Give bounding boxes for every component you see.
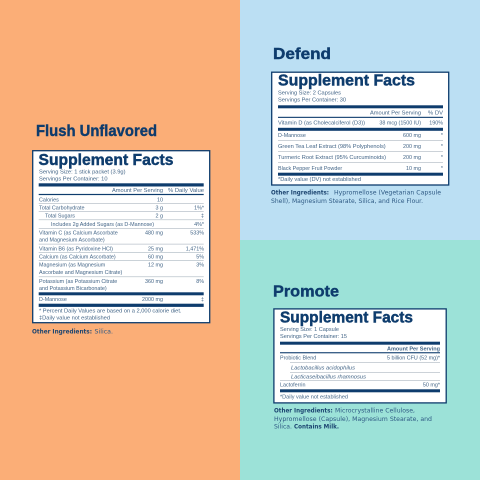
nutrient rows: 1,471% [186,246,204,252]
other ingredients: Defend: Other Ingredients: [271,190,329,197]
serving information: Serving Size: 1 stick packet (3.9g) [39,169,126,175]
nutrient rows: 3 g [156,205,163,211]
other ingredients: Defend [271,190,441,205]
other ingredients: Promote: Contains Milk. [294,423,339,430]
D-Mannose row: 2000 mg [142,297,163,303]
D-Mannose row: ‡ [201,297,204,303]
nutrient rows: 1%* [194,205,205,211]
label title: Supplement Facts [278,73,415,90]
ingredient rows: D-Mannose [278,133,306,139]
serving information: Serving Size: 1 Capsule [280,327,339,333]
ingredient rows [278,133,444,172]
serving information: Servings Per Container: 30 [278,98,346,104]
nutrient rows: Vitamin C (as Calcium Ascorbate [39,231,118,237]
serving information [280,327,347,340]
nutrient rows: Potassium (as Potassium Citrate [39,279,117,285]
probiotic blend rows: Lactobacillus acidophilus [291,365,355,371]
column headers [112,188,204,194]
label title: Supplement Facts [38,152,174,169]
nutrient rows: Total Sugars [45,214,75,220]
nutrient rows: 2 g [156,214,163,220]
ingredient rows: * [441,166,444,172]
ingredient rows: Turmeric Root Extract (95% Curcuminoids) [278,155,386,161]
nutrient rows: 533% [190,231,204,237]
other ingredients: Promote [274,408,432,430]
nutrient rows: ‡ [201,214,204,220]
nutrient rows: 10 [157,197,163,203]
column headers [370,110,443,116]
footnotes: ‡Daily value not established [39,315,110,321]
ingredient rows: Black Pepper Fruit Powder [278,166,342,172]
nutrient rows: 8% [196,279,204,285]
other ingredients: Defend: Hypromellose (Vegetarian Capsule [334,190,441,197]
probiotic blend rows: 50 mg* [423,382,441,388]
D-Mannose row [39,297,204,303]
nutrient rows [39,197,205,292]
footnotes: * Percent Daily Values are based on a 2,000 calorie diet. [39,308,182,314]
column header: Amount Per Serving [387,346,440,352]
serving information [278,91,346,104]
ingredient rows: * [441,155,444,161]
nutrient rows: and Magnesium Ascorbate) [39,238,105,244]
nutrient rows: 4%* [194,222,205,228]
ingredient rows: 600 mg [403,133,421,139]
column headers: % DV [428,110,443,116]
footnote: *Daily value not established [280,395,348,401]
footnote: *Daily value (DV) not established [278,177,361,183]
probiotic blend rows [280,356,441,388]
D-Mannose row: D-Mannose [39,297,67,303]
Vitamin D row: 38 mcg (1500 IU) [379,121,421,127]
panel: blue background [240,0,480,240]
label title: Supplement Facts [280,310,413,327]
other ingredients: Flush: Other Ingredients: [32,328,92,335]
nutrient rows: Calcium (as Calcium Ascorbate) [39,254,116,260]
other ingredients: Promote: Hypromellose (Capsule), Magnesium Stearate, and [274,416,432,423]
panel: Defend supplement facts label [272,72,449,185]
nutrient rows: Total Carbohydrate [39,205,85,211]
ingredient rows: 200 mg [403,155,421,161]
nutrient rows: Includes 2g Added Sugars (as D-Mannose) [51,222,154,228]
panel: Promote supplement facts label [274,309,446,403]
heading: Promote: Promote [273,284,339,301]
nutrient rows: 3% [196,263,204,269]
ingredient rows: * [441,133,444,139]
nutrient rows: 480 mg [145,231,163,237]
serving information [39,169,126,183]
nutrient rows: Vitamin B6 (as Pyridoxine HCl) [39,246,113,252]
probiotic blend rows: Lactoferrin [280,382,305,388]
panel: teal background [240,240,480,480]
Vitamin D row: 190% [429,121,443,127]
nutrient rows: Ascorbate and Magnesium Citrate) [39,270,122,276]
serving information: Serving Size: 2 Capsules [278,91,341,97]
ingredient rows: 10 mg [406,166,421,172]
column headers: Amount Per Serving [370,110,421,116]
other ingredients: Promote: Microcrystalline Cellulose, [335,408,415,415]
serving information: Servings Per Container: 15 [280,334,347,340]
probiotic blend rows: Lacticaseibacillus rhamnosus [291,374,366,380]
serving information: Servings Per Container: 10 [39,177,108,183]
ingredient rows: * [441,144,444,150]
other ingredients: Promote: Other Ingredients: [274,408,333,415]
probiotic blend rows: Probiotic Blend [280,356,316,362]
nutrient rows: and Potassium Bicarbonate) [39,286,107,292]
nutrient rows: 60 mg [148,254,163,260]
other ingredients: Defend: Shell), Magnesium Stearate, Silica, and Rice Flour. [271,198,423,205]
other ingredients: Promote: Silica. [274,423,292,430]
heading: Flush Unflavored: Flush Unflavored [36,123,157,140]
footnotes [39,308,182,321]
Vitamin D row [278,121,443,127]
nutrient rows: 360 mg [145,279,163,285]
panel: Flush supplement facts label [33,151,210,323]
nutrient rows: 12 mg [148,263,163,269]
probiotic blend rows: 5 billion CFU (52 mg)* [387,356,441,362]
nutrient rows: Magnesium (as Magnesium [39,263,106,269]
ingredient rows: Green Tea Leaf Extract (98% Polyphenols) [278,144,386,150]
column headers: % Daily Value [168,188,204,194]
other ingredients: Flush: Silica. [94,328,113,335]
nutrient rows: 5% [196,254,204,260]
nutrient rows: 25 mg [148,246,163,252]
Vitamin D row: Vitamin D (as Cholecalciferol (D3)) [278,121,365,127]
column headers: Amount Per Serving [112,188,163,194]
ingredient rows: 200 mg [403,144,421,150]
panel: orange background [0,0,240,480]
heading: Defend: Defend [273,46,331,63]
nutrient rows: Calories [39,197,59,203]
